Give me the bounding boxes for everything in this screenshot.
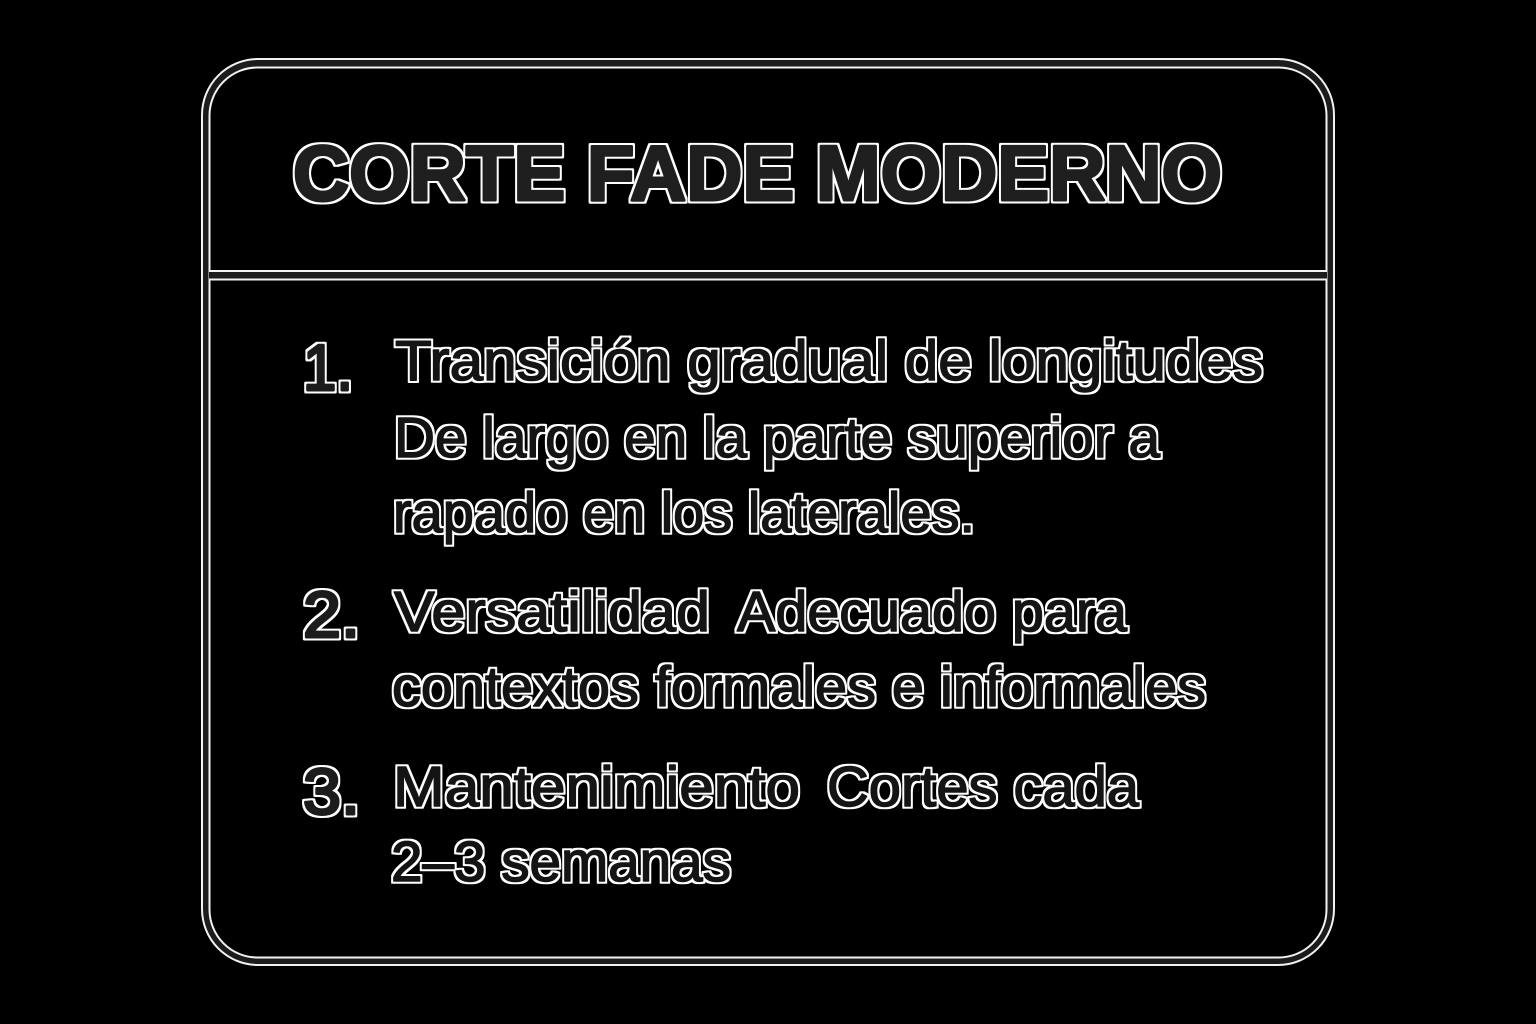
number 1: 1. (303, 331, 353, 404)
item 1 text: De largo en la parte superior a (394, 406, 1160, 470)
number 3: 3. (303, 755, 360, 828)
title: CORTE FADE MODERNO (293, 129, 1222, 217)
item 2 text (392, 580, 1206, 719)
item 3 text: 2–3 semanas (391, 830, 731, 894)
item 3 text (391, 755, 1139, 894)
item 1 text: Transición gradual de longitudes (395, 329, 1263, 393)
item 3 text: Cortes cada (827, 755, 1139, 819)
item 1 text (393, 329, 1263, 545)
item 2 text: contextos formales e informales (392, 655, 1206, 719)
list item 1 (303, 329, 1263, 545)
item 2 text: Versatilidad (394, 580, 710, 644)
number 2: 2. (303, 578, 360, 651)
list item 2 (303, 578, 1206, 719)
item 3 text: Mantenimiento (393, 755, 800, 819)
item 2 text: Adecuado para (737, 580, 1127, 644)
item 1 text: rapado en los laterales. (393, 481, 975, 545)
list item 3 (303, 755, 1139, 894)
panel: outer frame (202, 59, 1334, 965)
